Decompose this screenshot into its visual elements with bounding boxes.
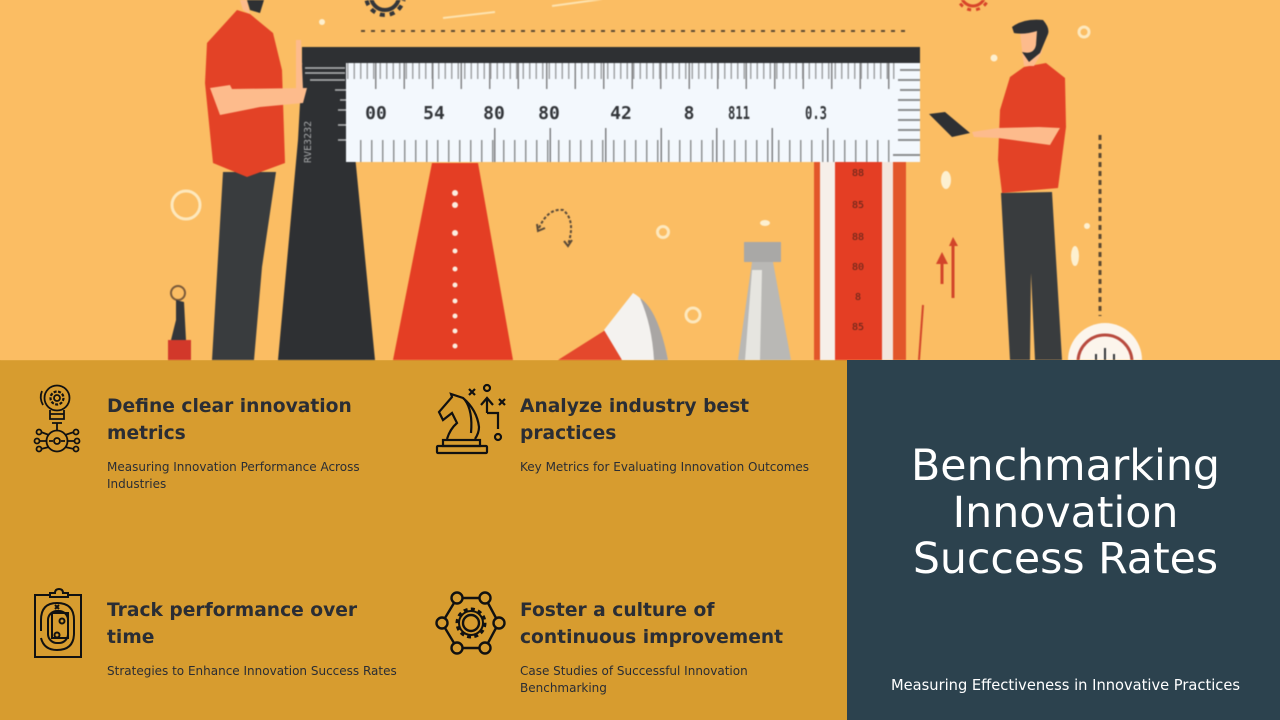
- horizontal ruler: [346, 63, 920, 162]
- black ruler top bar: [302, 47, 920, 63]
- vertical red ruler: 8: [855, 292, 861, 303]
- description: Case Studies of Successful Innovation Benchmarking: [520, 664, 748, 695]
- black trapezoid stand: RVE3232: [303, 121, 314, 163]
- hero illustration: people measuring with a giant ruler: [0, 0, 1143, 361]
- panel: culture of improvement: [435, 591, 783, 695]
- title: Success Rates: [913, 534, 1218, 584]
- horizontal ruler: 80: [483, 103, 505, 124]
- horizontal ruler: 00: [365, 103, 387, 124]
- vertical red ruler: [814, 162, 906, 360]
- decorative circles and marks: [172, 27, 1089, 322]
- heading: Foster a culture of continuous improvement: [520, 600, 783, 648]
- horizontal ruler: 42: [610, 103, 632, 124]
- vertical red ruler: 85: [852, 322, 864, 333]
- dotted measuring line: [361, 30, 906, 32]
- horizontal ruler: 811: [728, 103, 750, 124]
- megaphone: [558, 293, 668, 360]
- description: Key Metrics for Evaluating Innovation Outcomes: [520, 460, 809, 474]
- red cone: [393, 163, 513, 360]
- icon: light bulb with circuit: [34, 384, 80, 452]
- icon: clipboard with race track: [34, 588, 82, 658]
- vertical red ruler: 88: [852, 232, 864, 243]
- horizontal ruler: 80: [538, 103, 560, 124]
- icon: chess knight with strategy: [436, 384, 506, 454]
- panel: title: [847, 360, 1280, 720]
- heading: Track performance over time: [107, 600, 357, 648]
- icon: red gear at top: [957, 0, 989, 10]
- icon: dark gear at top: [366, 0, 404, 15]
- vertical red ruler: 85: [852, 200, 864, 211]
- black trapezoid stand: [278, 48, 375, 360]
- subtitle: Measuring Effectiveness in Innovative Practices: [891, 677, 1240, 694]
- heading: Define clear innovation metrics: [107, 396, 352, 444]
- title: [911, 441, 1220, 584]
- small key-shaped tool: [168, 286, 191, 360]
- curved arrow: [537, 210, 572, 246]
- title: Benchmarking: [911, 441, 1220, 491]
- gauge: [1068, 323, 1142, 397]
- panel: track performance: [34, 588, 397, 678]
- panel: define metrics: [34, 384, 360, 491]
- vertical red ruler: 80: [852, 262, 864, 273]
- description: Strategies to Enhance Innovation Success Rates: [107, 664, 397, 678]
- horizontal ruler: 54: [423, 103, 445, 124]
- panel: analyze best practices: [436, 384, 809, 474]
- vertical red ruler: 88: [852, 168, 864, 179]
- title: Innovation: [953, 488, 1178, 538]
- horizontal ruler: 0.3: [805, 103, 827, 124]
- right person: [929, 20, 1066, 360]
- left person: [205, 0, 307, 360]
- description: Measuring Innovation Performance Across Industries: [107, 460, 360, 491]
- red arrows: [919, 237, 958, 360]
- icon: gear in hexagon network: [435, 591, 506, 655]
- vertical dotted line: [1098, 135, 1102, 316]
- bottle: [738, 242, 791, 360]
- heading: Analyze industry best practices: [520, 396, 749, 444]
- horizontal ruler: 8: [684, 103, 694, 124]
- sparkle strokes: [443, 0, 610, 18]
